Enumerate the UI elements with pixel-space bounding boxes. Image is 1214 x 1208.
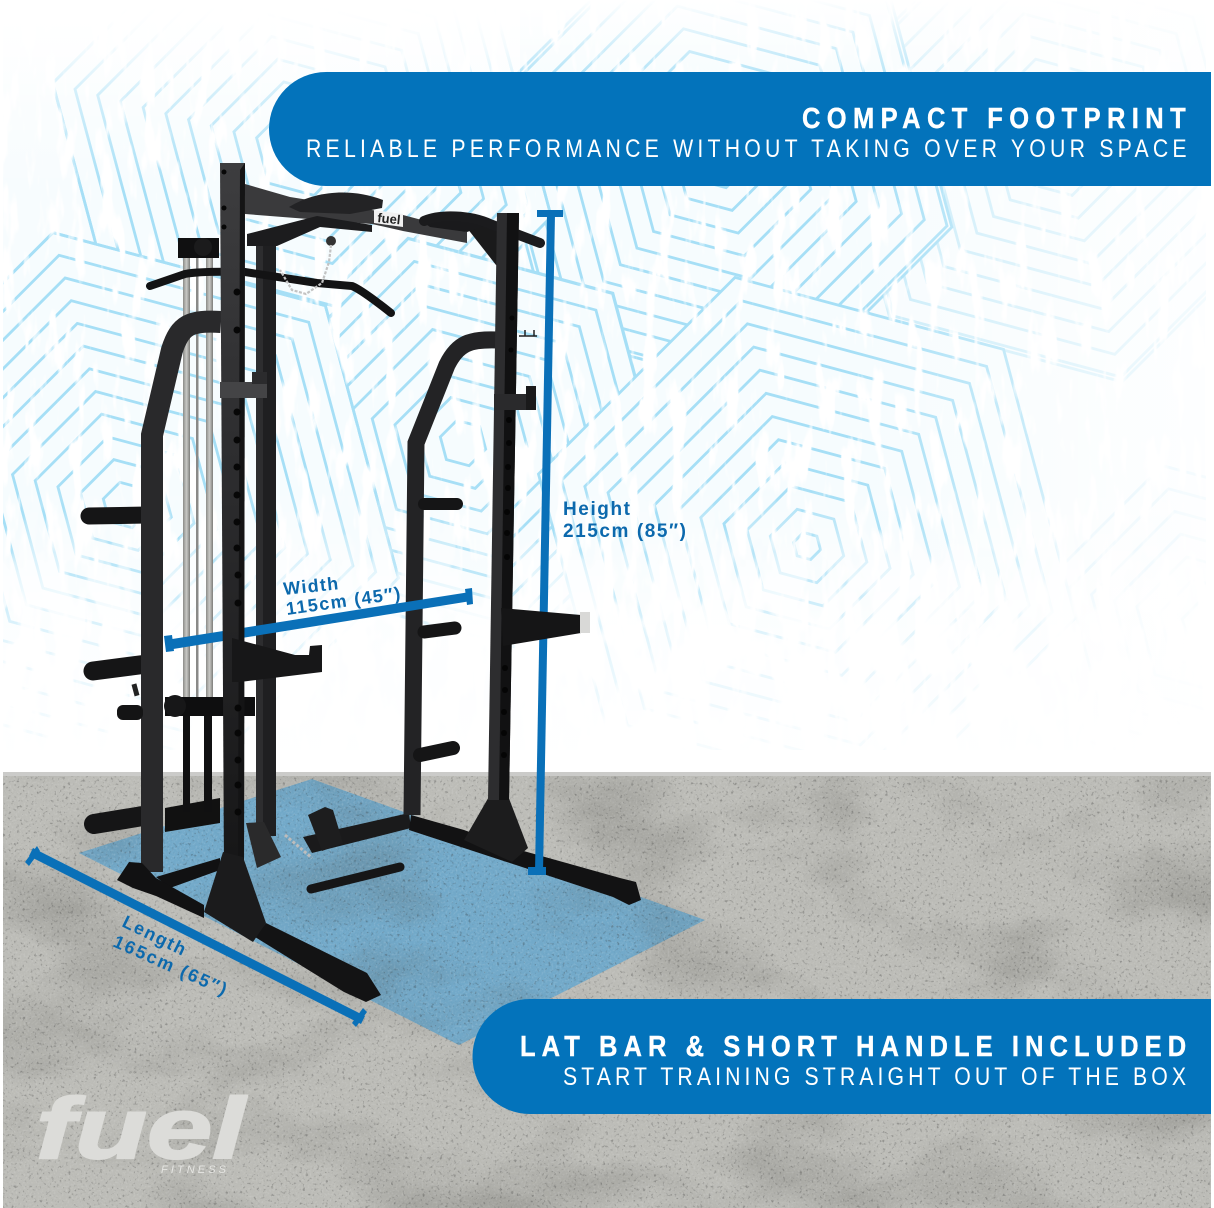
short handle (311, 867, 400, 889)
left handle (289, 192, 383, 214)
right upright post (488, 213, 537, 800)
left arched safety arm (152, 322, 221, 872)
banner subtitle: RELIABLE PERFORMANCE WITHOUT TAKING OVER YOUR SPACE (306, 134, 1187, 162)
label: width: Width (282, 573, 339, 599)
height dimension line (528, 210, 563, 875)
left plate pegs (89, 515, 149, 824)
rack rear frame and cables (165, 236, 411, 868)
right plate pegs (420, 504, 457, 755)
fuel fitness logo: FITNESS (161, 1164, 227, 1176)
label: length: 165cm (65″) (110, 931, 230, 999)
lat bar and chain (150, 245, 391, 313)
label: height: Height (563, 499, 631, 520)
fuel fitness logo: fuel (36, 1081, 248, 1177)
fuel badge: fuel (377, 210, 401, 227)
carriage (117, 683, 255, 720)
banner title: LAT BAR & SHORT HANDLE INCLUDED (520, 1029, 1186, 1062)
pulley block (178, 238, 219, 258)
banner title: COMPACT FOOTPRINT (802, 101, 1186, 134)
top pull-up crossbar (245, 184, 540, 270)
right handle (423, 216, 540, 243)
banner: lat bar and short handle (472, 999, 1211, 1114)
right rear gusset (464, 788, 528, 862)
power rack (89, 163, 641, 1002)
label: height: 215cm (85″) (563, 521, 686, 542)
label: length: Length (119, 912, 189, 959)
banner: compact footprint (269, 72, 1211, 186)
right arched safety arm (412, 340, 498, 815)
front base beam, foot and gusset (117, 852, 381, 1002)
label: height (563, 499, 686, 542)
width dimension line (164, 588, 473, 652)
blue footprint mat (79, 779, 705, 1045)
base beams rear (156, 788, 641, 905)
front-left upright post (220, 163, 267, 870)
label: width: 115cm (45″) (285, 583, 401, 619)
length dimension line (25, 846, 367, 1027)
left spotter arm (232, 638, 322, 682)
banner subtitle: START TRAINING STRAIGHT OUT OF THE BOX (563, 1062, 1186, 1090)
background: hexagon line pattern (0, 0, 1214, 815)
concrete floor (3, 772, 1211, 1208)
right spotter arm (501, 608, 590, 646)
